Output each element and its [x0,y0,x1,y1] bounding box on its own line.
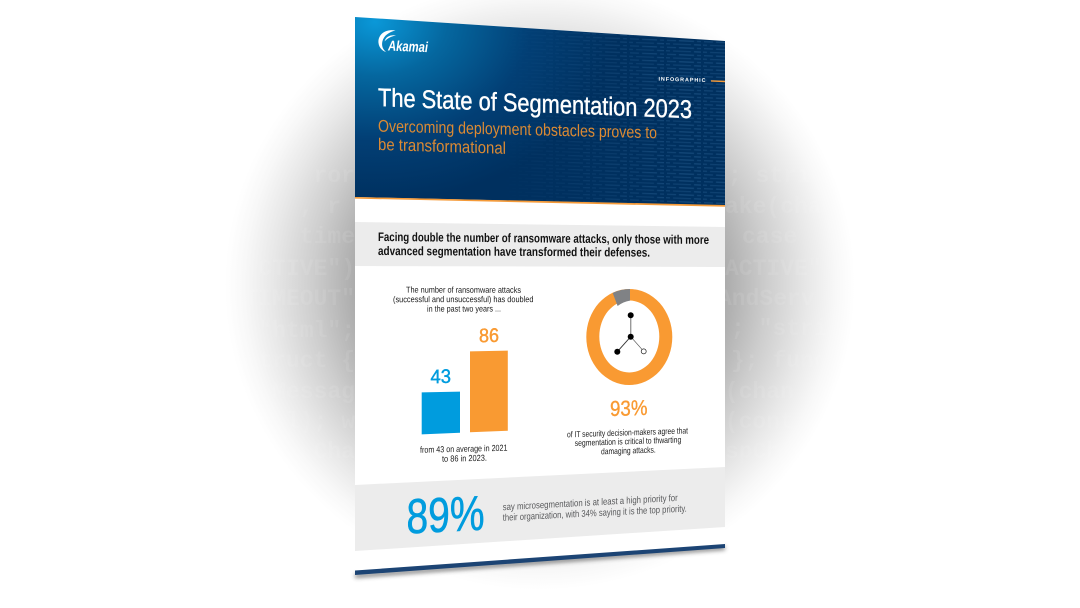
ghost code text right: n(cont [711,409,794,435]
ghost code text right: case [742,224,797,250]
ghost code text left: Cha [314,439,355,465]
ghost code text left: "html"; [258,318,355,344]
ghost code text right: e(chan [711,379,794,405]
text: microsegmentation priority: say microsegmentation is at least a high priority for [503,493,678,513]
subtitle [378,117,657,158]
ghost code text left [245,163,355,465]
text: bar chart intro [393,285,534,314]
panel: headline band [355,222,725,267]
text: donut caption: of IT security decision-makers agree that [567,425,688,439]
page shadow [355,546,725,578]
panel: headline band: advanced segmentation have transformed their defenses. [378,244,650,260]
text: donut caption: damaging attacks. [601,445,656,456]
bar chart [422,325,508,434]
bar: 2023 value 86: 86 [479,325,499,347]
ghost code text left: , r [300,194,355,220]
text: microsegmentation priority [503,493,687,524]
bar: 2021 value 43: 43 [430,366,451,388]
logo: Akamai [378,30,429,56]
ghost code text right: AndServ [718,286,815,312]
ghost code text left: ror [314,163,355,189]
text: bar chart intro: (successful and unsuccessful) has doubled [393,294,534,304]
ghost code text right: ; "stri [731,316,828,342]
text: donut caption [567,425,688,456]
ghost code text left: CTIVE") [258,256,355,282]
donut chart 93% [586,289,672,385]
bottom stripe [355,544,725,575]
panel: 89% band [355,467,725,551]
stat: 89%: 89% [406,487,484,544]
text: bar chart intro: The number of ransomware attacks [406,285,521,295]
subtitle: Overcoming deployment obstacles proves to [378,117,657,142]
ghost code text right: spCh [725,439,780,465]
ghost code text right: ACTIVE" [725,256,822,282]
text: bar chart caption: from 43 on average in 2021 [420,443,508,455]
text: bar chart caption [420,443,508,464]
ghost code text left: time [300,224,355,250]
ghost code text right: ake(cha [725,194,822,220]
text: bar chart caption: to 86 in 2023. [442,453,487,464]
subtitle: be transformational [378,135,506,158]
text: bar chart intro: in the past two years ... [427,303,501,314]
title: The State of Segmentation 2023 [378,84,692,124]
label: infographic: INFOGRAPHIC [658,77,706,84]
ghost code text right: }; func [731,348,828,374]
ghost code text left: Messag [272,379,355,405]
ghost code text left: l); w [286,409,355,435]
logo: Akamai: Akamai [387,38,429,56]
icon: network nodes [614,312,646,355]
ghost code text left: truct { [258,348,355,374]
header panel [355,17,725,207]
text: microsegmentation priority: their organization, with 34% saying it is the top priority. [503,504,687,524]
ghost code text right: ; stri [728,163,811,189]
text: donut caption: segmentation is critical to thwarting [575,434,681,448]
panel: headline band: Facing double the number of ransomware attacks, only those with more [378,230,709,247]
stat: 93%: 93% [610,396,648,421]
ghost code text left: TIMEOUT" [245,286,355,312]
page: infographic sheet [355,17,725,575]
ghost code text right [711,163,828,465]
